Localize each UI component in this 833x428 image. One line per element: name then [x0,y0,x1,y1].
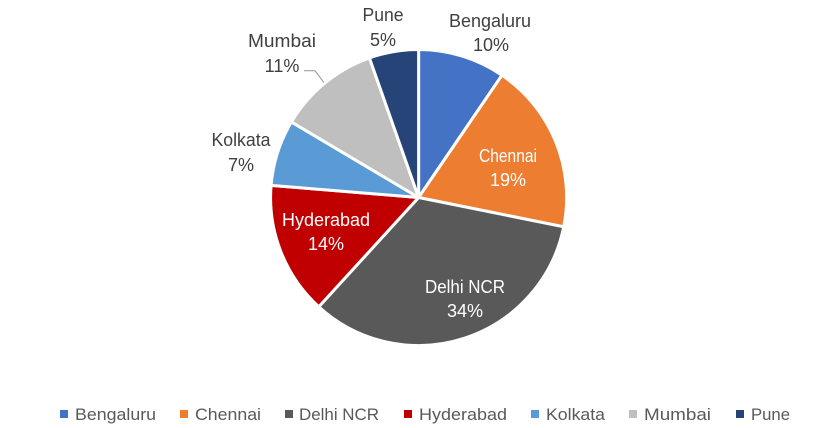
slice: Mumbai [291,58,419,198]
label: Hyderabad 14%: 14% [308,234,344,254]
label: Delhi NCR 34% [425,277,505,321]
label: Mumbai 11%: 11% [265,56,299,76]
label: Hyderabad 14%: Hyderabad [282,210,370,230]
label: Pune 5% [362,5,404,50]
label: Mumbai 11%: Mumbai [248,31,316,51]
label: Delhi NCR 34%: Delhi NCR [425,277,505,297]
slice: Pune [369,49,419,197]
legend item: Hyderabad: Hyderabad [419,405,507,424]
label: Hyderabad 14% [282,210,370,254]
legend item: Delhi NCR: Delhi NCR [299,405,379,424]
slice: Kolkata [271,122,419,198]
legend item: Kolkata: Kolkata [546,405,606,424]
legend item: Chennai: Chennai [195,405,261,424]
slice: Bengaluru [419,49,502,197]
label: Bengaluru 10%: 10% [473,35,509,55]
pie chart [271,49,567,346]
leader line: Mumbai [304,71,324,83]
label: Chennai 19%: Chennai [479,146,537,166]
legend item: Pune: Pune [751,405,790,424]
label: Kolkata 7%: 7% [228,155,254,175]
label: Chennai 19%: 19% [490,170,526,190]
label: Bengaluru 10%: Bengaluru [449,11,531,31]
label: Pune 5%: Pune [362,5,404,25]
slice: Hyderabad [271,185,419,307]
legend [60,405,790,424]
label: Delhi NCR 34%: 34% [447,301,483,321]
label: Chennai 19% [479,146,537,190]
label: Kolkata 7% [212,130,271,175]
label: Kolkata 7%: Kolkata [212,130,271,150]
label: Mumbai 11% [248,31,316,76]
label: Pune 5%: 5% [370,30,396,50]
slice: Delhi NCR [319,198,564,346]
legend item: Mumbai: Mumbai [644,405,711,424]
label: Bengaluru 10% [449,11,531,55]
slice: Chennai [419,75,567,227]
legend item: Bengaluru: Bengaluru [75,405,156,424]
